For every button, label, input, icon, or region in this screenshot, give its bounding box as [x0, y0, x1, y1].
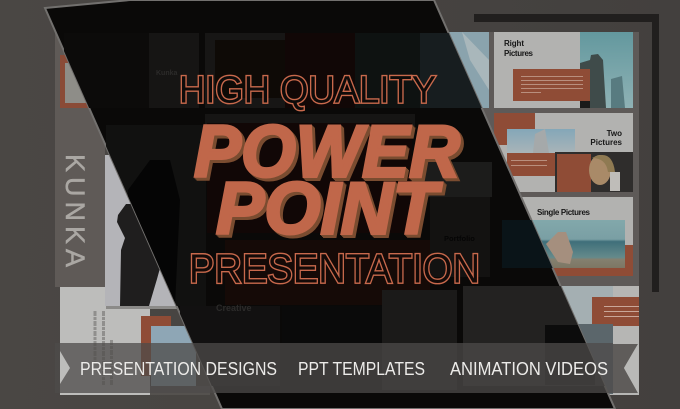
- heading: HIGH QUALITY: HIGH QUALITY: [179, 70, 436, 112]
- dark corner bracket: [474, 14, 659, 292]
- ribbon banner: [55, 343, 638, 393]
- right slide backing: [445, 32, 639, 288]
- slide: two pictures: Pictures: [590, 138, 623, 147]
- dark diagonal panel: Kunka: [156, 70, 178, 77]
- slide: right pictures: [494, 32, 633, 108]
- ribbon label: presentation designs: PRESENTATION DESIGNS: [80, 359, 277, 379]
- heading: POWER: POWER: [194, 112, 460, 192]
- heading: POINT: POINT: [219, 172, 445, 252]
- slide: single pictures: [500, 197, 633, 276]
- slide: bottom right: [560, 286, 639, 395]
- heading: POWER: POWER: [197, 114, 463, 196]
- ribbon label: ppt templates: PPT TEMPLATES: [298, 359, 425, 379]
- heading: POWER: POWER: [195, 112, 461, 194]
- photo slide strip: [445, 32, 489, 108]
- heading: POWER: POWER: [196, 114, 462, 194]
- ribbon label: animation videos: ANIMATION VIDEOS: [450, 359, 608, 379]
- brand name KUNKA: KUNKA: [60, 154, 90, 267]
- slide: two pictures: Two: [607, 129, 622, 138]
- slide: right pictures: Right: [504, 39, 524, 48]
- heading: HIGH QUALITY: HIGH QUALITY: [179, 70, 436, 112]
- dark diagonal panel: Portfolio: [444, 234, 475, 243]
- heading: PRESENTATION: PRESENTATION: [189, 246, 480, 292]
- small vertical slide text: [95, 311, 112, 385]
- heading: POINT: POINT: [218, 170, 444, 252]
- slide: two pictures: [494, 113, 633, 192]
- heading: POINT: POINT: [217, 170, 443, 250]
- heading: POINT: POINT: [216, 168, 442, 250]
- dark diagonal panel: Creative: [216, 303, 252, 313]
- heading: PRESENTATION: PRESENTATION: [189, 246, 480, 292]
- slide: single pictures: Single Pictures: [537, 208, 591, 217]
- left slide column: [55, 33, 210, 395]
- slide: right pictures: Pictures: [504, 49, 534, 58]
